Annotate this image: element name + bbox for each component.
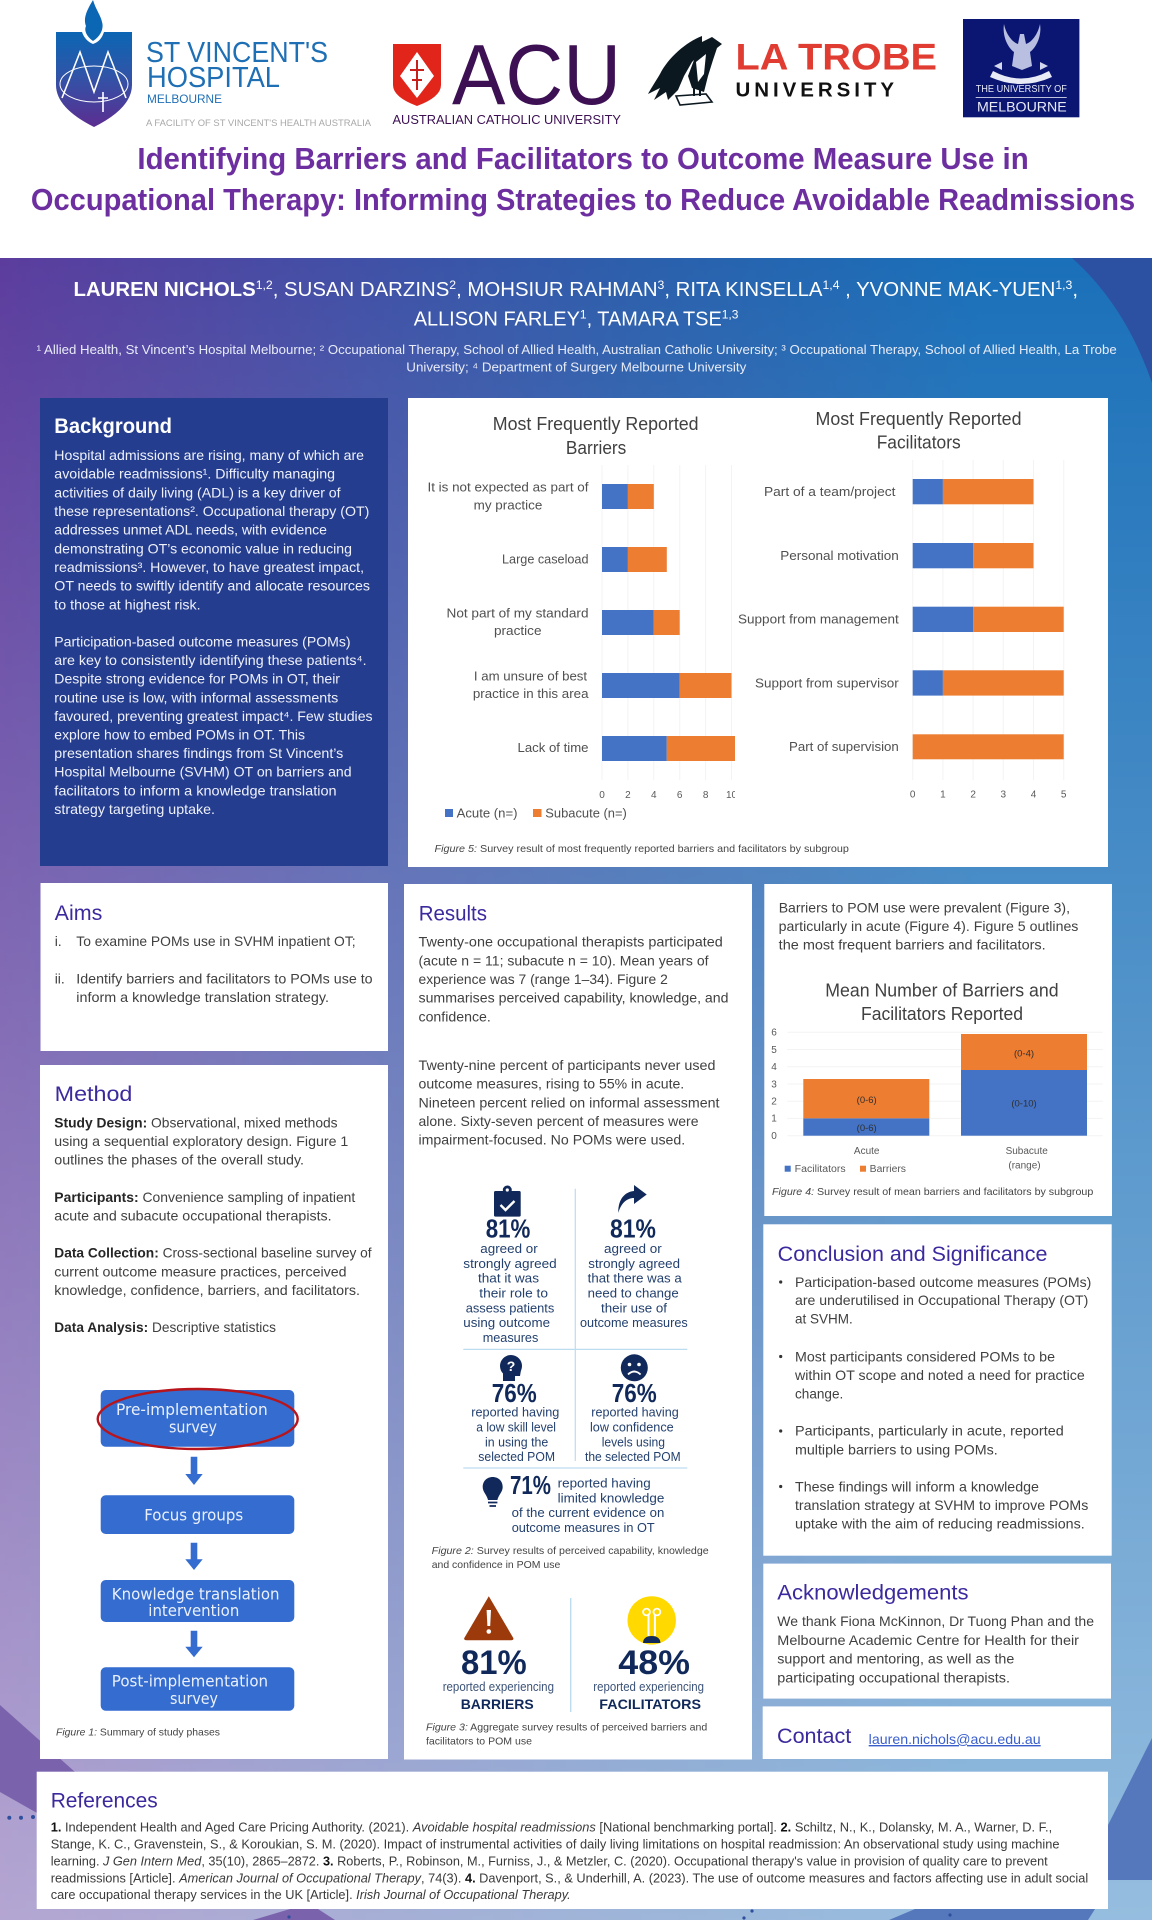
stat: 71 percent limited knowledge: of the current evidence on	[512, 1505, 664, 1520]
infographic: figure 2 capability, knowledge and confidence	[463, 1185, 688, 1535]
chart: mean number of barriers and facilitators: 6	[771, 1028, 777, 1039]
authors: 2	[449, 278, 456, 292]
stat: 81 percent barriers: reported experiencing	[443, 1680, 554, 1694]
chart: most frequently reported facilitators	[738, 409, 1067, 800]
infographic: figure 3 barriers and facilitators	[443, 1596, 704, 1712]
text: background body: demonstrating OT’s economic value in reducing	[54, 540, 352, 556]
stat: 76 percent low skill	[471, 1380, 559, 1464]
text: aims list	[55, 933, 373, 1005]
text: background body: Despite strong evidence for POMs in OT, their	[54, 671, 340, 687]
flow diagram: study phases: survey	[169, 1417, 217, 1436]
text: conclusion bullets: These findings will inform a knowledge	[795, 1478, 1039, 1494]
authors: 1	[580, 307, 587, 321]
panel: aims	[40, 883, 388, 1051]
chart: most frequently reported barriers: 8	[703, 790, 709, 801]
stat: 48 percent facilitators: FACILITATORS	[599, 1696, 701, 1712]
text: results body: impairment-focused. No POMs were used.	[418, 1132, 685, 1148]
stat: 81 percent need to change: 81%	[610, 1216, 656, 1244]
text: method body: current outcome measure practices, perceived	[54, 1264, 347, 1280]
text: aims list: i.	[55, 933, 62, 949]
panel: contact	[763, 1706, 1111, 1759]
text: results body	[418, 934, 728, 1148]
stat: 81 percent need to change: agreed or	[604, 1241, 662, 1256]
chart: most frequently reported facilitators: 3	[1001, 789, 1007, 800]
logo: University of Melbourne: MELBOURNE	[977, 100, 1067, 115]
text: conclusion bullets: multiple barriers to using POMs.	[795, 1441, 998, 1457]
authors: , MOHSIUR RAHMAN	[456, 279, 658, 301]
chart: mean number of barriers and facilitators	[771, 981, 1103, 1175]
stat: 81 percent need to change	[580, 1216, 688, 1330]
text: aims list: inform a knowledge translation strategy.	[76, 989, 329, 1005]
text: acknowledgements body: Melbourne Academic Centre for Health for their	[777, 1632, 1079, 1648]
caption: figure 3: facilitators to POM use	[426, 1735, 532, 1747]
text: barriers summary: particularly in acute (Figure 4). Figure 5 outlines	[779, 918, 1078, 934]
text: acknowledgements body: participating occupational therapists.	[777, 1670, 1010, 1686]
affiliations	[37, 342, 1117, 375]
chart: most frequently reported barriers: practice	[494, 623, 542, 638]
stat: 71 percent limited knowledge	[510, 1472, 664, 1535]
text: background body	[54, 447, 373, 817]
chart: mean number of barriers and facilitators: 1	[771, 1114, 777, 1125]
caption: figure 2: and confidence in POM use	[432, 1559, 560, 1571]
text: barriers summary: the most frequent barriers and facilitators.	[779, 936, 1046, 952]
stat: 76 percent low skill: selected POM	[478, 1449, 555, 1464]
heading: acknowledgements: Acknowledgements	[777, 1581, 969, 1604]
logo: St Vincent's Hospital Melbourne: MELBOURNE	[147, 94, 222, 106]
chart: most frequently reported barriers: Barriers	[566, 438, 626, 458]
chart: mean number of barriers and facilitators: 4	[771, 1062, 777, 1073]
title: Identifying Barriers and Facilitators to Outcome Measure Use in	[137, 141, 1029, 176]
stat: 48 percent facilitators	[593, 1644, 704, 1712]
text: results body: (acute n = 11; subacute n = 10). Mean years of	[418, 952, 709, 968]
stat: 76 percent low confidence: reported having	[591, 1404, 679, 1419]
text: method body: Study Design: Observational, mixed methods	[54, 1114, 338, 1130]
chart: most frequently reported facilitators: Part of supervision	[789, 739, 899, 754]
panel: method	[40, 1065, 388, 1759]
stat: 76 percent low skill: in using the	[485, 1434, 548, 1449]
authors: LAUREN NICHOLS	[74, 279, 256, 301]
flow diagram: study phases: Focus groups	[144, 1506, 243, 1525]
text: contact email: lauren.nichols@acu.edu.au	[869, 1731, 1041, 1747]
stat: 81 percent role to assess: using outcome	[463, 1315, 550, 1330]
icon: sad face	[621, 1354, 648, 1381]
chart: mean number of barriers and facilitators: (0-10)	[1011, 1099, 1037, 1110]
chart: most frequently reported barriers: 10	[726, 790, 737, 801]
stat: 48 percent facilitators: reported experiencing	[593, 1680, 704, 1694]
text: method body: Participants: Convenience sampling of inpatient	[54, 1189, 355, 1205]
stat: 81 percent barriers: 81%	[461, 1644, 527, 1682]
panel: references	[37, 1772, 1108, 1909]
authors: 3	[658, 278, 665, 292]
chart: most frequently reported barriers: Most Frequently Reported	[493, 414, 699, 434]
heading: results: Results	[419, 903, 487, 926]
logo: Australian Catholic University: AUSTRALIAN CATHOLIC UNIVERSITY	[392, 113, 622, 127]
text: background body: routine use is low, with informal assessments	[54, 689, 338, 705]
text: background body: activities of daily living (ADL) is a key driver of	[54, 484, 341, 500]
stat: 81 percent role to assess: agreed or	[480, 1241, 538, 1256]
stat: 81 percent need to change: outcome measures	[580, 1315, 688, 1330]
logo: St Vincent's Hospital Melbourne: HOSPITAL	[147, 62, 280, 94]
legend: acute and subacute	[445, 806, 627, 821]
chart: most frequently reported facilitators: Most Frequently Reported	[816, 409, 1022, 429]
text: method body: Data Collection: Cross-sectional baseline survey of	[54, 1245, 372, 1261]
chart: most frequently reported barriers: It is not expected as part of	[428, 480, 589, 495]
chart: most frequently reported barriers: 6	[677, 790, 683, 801]
text: background body: OT needs to swiftly identify and allocate resources	[54, 578, 370, 594]
text: aims list: ii.	[55, 970, 65, 986]
logo: St Vincent's Hospital Melbourne	[56, 0, 372, 129]
text: background body: addresses unmet ADL needs, with evidence	[54, 522, 327, 538]
text: conclusion bullets: translation strategy at SVHM to improve POMs	[795, 1497, 1088, 1513]
stat: 81 percent need to change: strongly agreed	[588, 1256, 680, 1271]
text: method body: outlines the phases of the overall study.	[54, 1152, 304, 1168]
panel: acknowledgements	[763, 1564, 1111, 1699]
stat: 81 percent role to assess: assess patients	[466, 1300, 555, 1315]
text: conclusion bullets: Most participants considered POMs to be	[795, 1348, 1055, 1364]
chart: most frequently reported facilitators: 0	[910, 789, 916, 800]
stat: 76 percent low confidence: the selected POM	[585, 1449, 681, 1464]
heading: references: References	[51, 1790, 158, 1813]
chart: mean number of barriers and facilitators: Facilitators Reported	[861, 1004, 1023, 1024]
caption: figure 2	[432, 1545, 709, 1571]
heading: aims: Aims	[55, 902, 102, 925]
text: reference list: care occupational therapy services in the UK [Article]. Irish Journal of Occupational Therapy.	[51, 1887, 571, 1902]
text: conclusion bullets: are underutilised in Occupational Therapy (OT)	[795, 1292, 1088, 1308]
chart: most frequently reported facilitators: Personal motivation	[780, 548, 899, 563]
chart: mean number of barriers and facilitators: (range)	[1008, 1160, 1041, 1172]
panel: figure 5 barriers and facilitators charts	[408, 398, 1108, 867]
stat: 81 percent role to assess: measures	[483, 1330, 539, 1345]
authors: 1,3	[722, 307, 739, 321]
authors: 1,2	[256, 278, 273, 292]
text: conclusion bullets	[779, 1274, 1091, 1532]
text: background body: explore how to embed POMs in OT. This	[54, 726, 305, 742]
legend: acute and subacute: Acute (n=)	[457, 806, 518, 821]
chart: most frequently reported facilitators: Support from management	[738, 612, 899, 627]
chart: most frequently reported barriers: practice in this area	[473, 686, 589, 701]
text: reference list: Stange, K. C., Gravenstein, S., & Koroukian, S. M. (2020). Impact of instrumental activities of daily living limitations on hospital readmission: An observational study using machine	[51, 1837, 1059, 1852]
legend: facilitators and barriers: Facilitators	[795, 1164, 846, 1175]
affiliations: ¹ Allied Health, St Vincent’s Hospital Melbourne; ² Occupational Therapy, School of Allied Health, Australian Catholic University; ³ Occupational Therapy, School of Allied Health, La Trobe	[37, 342, 1117, 357]
caption: figure 1: Figure 1: Summary of study phases	[56, 1727, 220, 1739]
authors: , RITA KINSELLA	[664, 279, 823, 301]
flow diagram: study phases: Post-implementation	[112, 1672, 268, 1691]
text: method body: Data Analysis: Descriptive statistics	[54, 1319, 276, 1335]
chart: mean number of barriers and facilitators: 2	[771, 1096, 777, 1108]
chart: mean number of barriers and facilitators: 3	[771, 1079, 777, 1090]
chart: most frequently reported barriers: my practice	[474, 497, 542, 512]
stat: 76 percent low confidence: 76%	[612, 1380, 657, 1408]
panel: background	[40, 398, 388, 866]
chart: mean number of barriers and facilitators: Subacute	[1006, 1146, 1048, 1157]
flow diagram: study phases: Pre-implementation	[116, 1400, 268, 1419]
stat: 81 percent need to change: need to change	[588, 1285, 679, 1300]
text: results body: alone. Sixty-seven percent of measures were	[418, 1113, 699, 1129]
text: results body: summarises perceived capability, knowledge, and	[418, 990, 728, 1006]
text: aims list: Identify barriers and facilitators to POMs use to	[76, 970, 373, 986]
logo: Australian Catholic University	[392, 28, 622, 127]
text: reference list: learning. J Gen Intern Med, 35(10), 2865–2872. 3. Roberts, P., Robinson, M., Furniss, J., & Metzler, C. (2020). Occupational therapy's value in provision of quality care to prevent	[51, 1853, 1048, 1868]
chart: most frequently reported barriers: I am unsure of best	[474, 668, 587, 683]
logo: St Vincent's Hospital Melbourne: A FACILITY OF ST VINCENT'S HEALTH AUSTRALIA	[146, 118, 372, 129]
chart: most frequently reported barriers: 0	[599, 790, 605, 801]
text: results body: outcome measures, rising to 55% in acute.	[418, 1076, 684, 1092]
stat: 71 percent limited knowledge: 71%	[510, 1472, 551, 1500]
panel: conclusion and significance	[763, 1224, 1112, 1556]
text: reference list	[51, 1820, 1088, 1902]
stat: 76 percent low confidence	[585, 1380, 681, 1464]
chart: most frequently reported facilitators: Support from supervisor	[755, 675, 899, 690]
panel: results continued with figure 4	[764, 884, 1112, 1216]
legend: acute and subacute: Subacute (n=)	[545, 806, 627, 821]
chart: most frequently reported facilitators: Part of a team/project	[764, 484, 896, 499]
text: reference list: readmissions [Article]. American Journal of Occupational Therapy, 74(3). 4. Davenport, S., & Underhill, A. (2023). The use of outcome measures and factors affecting use in adult social	[51, 1870, 1088, 1885]
flow diagram: study phases	[98, 1389, 298, 1711]
icon: warning triangle	[464, 1596, 513, 1640]
stat: 71 percent limited knowledge: outcome measures in OT	[512, 1520, 655, 1535]
flow diagram: study phases: survey	[170, 1689, 218, 1708]
stat: 76 percent low confidence: low confidence	[590, 1419, 674, 1434]
logo: University of Melbourne	[963, 19, 1079, 117]
affiliations: University; ⁴ Department of Surgery Melbourne University	[406, 360, 747, 375]
authors: 1,3	[1055, 278, 1073, 292]
text: background body: readmissions³. However, to have greatest impact,	[54, 559, 364, 575]
authors: , SUSAN DARZINS	[273, 279, 449, 301]
stat: 76 percent low skill: 76%	[492, 1380, 537, 1408]
chart: most frequently reported barriers: Lack of time	[518, 740, 588, 755]
text: background body: strategy targeting uptake.	[54, 801, 215, 817]
chart: most frequently reported facilitators: 4	[1031, 789, 1037, 800]
chart: most frequently reported facilitators: 5	[1061, 789, 1067, 800]
text: acknowledgements body	[777, 1613, 1094, 1686]
authors	[74, 278, 1078, 330]
icon: head with question mark	[500, 1355, 522, 1381]
chart: mean number of barriers and facilitators: (0-6)	[857, 1095, 877, 1106]
text: conclusion bullets: within OT scope and noted a need for practice	[794, 1367, 1085, 1383]
heading: method: Method	[55, 1083, 132, 1106]
stat: 76 percent low skill: a low skill level	[476, 1419, 556, 1434]
chart: most frequently reported barriers	[428, 414, 737, 801]
chart: mean number of barriers and facilitators: (0-6)	[857, 1123, 877, 1134]
text: results body: confidence.	[418, 1008, 491, 1024]
panel: results	[404, 884, 752, 1760]
caption: figure 2: Figure 2: Survey results of perceived capability, knowledge	[432, 1545, 709, 1557]
text: conclusion bullets: Participation-based outcome measures (POMs)	[795, 1274, 1091, 1290]
authors: 1,4	[823, 278, 840, 292]
text: results body: Twenty-nine percent of participants never used	[418, 1057, 716, 1073]
caption: figure 3	[426, 1722, 707, 1747]
legend: facilitators and barriers	[785, 1164, 906, 1175]
stat: 81 percent role to assess	[463, 1216, 557, 1345]
chart: mean number of barriers and facilitators: 5	[771, 1045, 777, 1056]
stat: 81 percent role to assess: strongly agreed	[463, 1256, 557, 1271]
text: background body: avoidable readmissions¹. Difficulty managing	[54, 466, 335, 482]
text: acknowledgements body: We thank Fiona McKinnon, Dr Tuong Phan and the	[777, 1613, 1094, 1629]
text: conclusion bullets: uptake with the aim of reducing readmissions.	[795, 1516, 1085, 1532]
icon: head with question mark: ?	[507, 1358, 515, 1374]
stat: 76 percent low skill: reported having	[471, 1404, 559, 1419]
stat: 76 percent low confidence: levels using	[602, 1434, 665, 1449]
heading: contact: Contact	[777, 1725, 851, 1748]
heading: background: Background	[54, 415, 172, 438]
stat: 81 percent role to assess: their role to	[479, 1285, 548, 1300]
icon: yellow idea bulb	[628, 1596, 676, 1645]
text: method body: acute and subacute occupational therapists.	[54, 1208, 332, 1224]
icon: curved arrow	[618, 1185, 647, 1213]
logo: University of Melbourne: THE UNIVERSITY OF	[976, 84, 1067, 95]
logo: St Vincent's Hospital Melbourne: ST VINCENT'S	[146, 37, 328, 69]
caption: figure 5: Figure 5: Survey result of most frequently reported barriers and facilitators by subgroup	[434, 843, 849, 855]
chart: mean number of barriers and facilitators: Mean Number of Barriers and	[825, 981, 1059, 1001]
text: aims list: To examine POMs use in SVHM inpatient OT;	[76, 933, 356, 949]
text: background body: facilitators to inform a knowledge translation	[54, 782, 337, 798]
stat: 48 percent facilitators: 48%	[618, 1644, 690, 1682]
text: conclusion bullets: change.	[795, 1386, 843, 1402]
text: background body: to those at highest risk.	[54, 596, 201, 612]
stat: 71 percent limited knowledge: reported having	[558, 1476, 651, 1491]
text: method body: knowledge, confidence, barriers, and facilitators.	[54, 1282, 360, 1298]
chart: mean number of barriers and facilitators: (0-4)	[1014, 1049, 1034, 1060]
text: conclusion bullets: Participants, particularly in acute, reported	[795, 1423, 1064, 1439]
authors: ALLISON FARLEY	[414, 308, 580, 330]
authors: , YVONNE MAK-YUEN	[839, 279, 1055, 301]
text: results body: experience was 7 (range 1–34). Figure 2	[418, 971, 668, 987]
text: background body: are key to consistently identifying these patients⁴.	[54, 652, 367, 668]
logo: La Trobe University: UNIVERSITY	[736, 79, 894, 102]
text: method body	[54, 1114, 372, 1335]
text: acknowledgements body: support and mentoring, as well as the	[777, 1651, 1015, 1667]
text: background body: Hospital Melbourne (SVHM) OT on barriers and	[54, 764, 352, 780]
legend: facilitators and barriers: Barriers	[870, 1164, 906, 1175]
logo: La Trobe University	[648, 36, 937, 105]
chart: most frequently reported barriers: Not part of my standard	[446, 605, 588, 620]
title	[31, 141, 1135, 217]
chart: most frequently reported facilitators: 1	[940, 789, 946, 800]
chart: mean number of barriers and facilitators: Acute	[854, 1146, 880, 1157]
text: results body: Nineteen percent relied on informal assessment	[418, 1094, 720, 1110]
text: barriers summary: Barriers to POM use were prevalent (Figure 3),	[779, 900, 1070, 916]
logo: Australian Catholic University: ACU	[452, 28, 621, 123]
stat: 81 percent need to change: their use of	[601, 1300, 667, 1315]
stat: 71 percent limited knowledge: limited knowledge	[558, 1490, 664, 1506]
chart: mean number of barriers and facilitators: 0	[771, 1131, 777, 1142]
chart: most frequently reported barriers: 2	[625, 790, 631, 801]
text: conclusion bullets: at SVHM.	[795, 1311, 853, 1327]
stat: 81 percent need to change: that there was a	[588, 1270, 682, 1286]
chart: most frequently reported barriers: 4	[651, 790, 657, 801]
chart: most frequently reported facilitators: 2	[970, 789, 976, 800]
flow diagram: study phases: Knowledge translation	[112, 1584, 280, 1603]
text: background body: Participation-based outcome measures (POMs)	[54, 633, 351, 649]
flow diagram: study phases: intervention	[148, 1601, 239, 1620]
chart: most frequently reported facilitators: Facilitators	[877, 433, 961, 453]
authors: , TAMARA TSE	[587, 308, 722, 330]
icon: clipboard with check	[494, 1186, 521, 1217]
stat: 81 percent barriers: BARRIERS	[461, 1696, 534, 1712]
text: barriers summary	[779, 900, 1078, 952]
text: results body: Twenty-one occupational therapists participated	[418, 934, 723, 950]
text: background body: these representations². Occupational therapy (OT)	[54, 503, 369, 519]
icon: light bulb	[483, 1477, 503, 1506]
text: method body: using a sequential exploratory design. Figure 1	[54, 1133, 349, 1149]
caption: figure 4: Figure 4: Survey result of mean barriers and facilitators by subgroup	[772, 1186, 1093, 1198]
caption: figure 3: Figure 3: Aggregate survey results of perceived barriers and	[426, 1722, 707, 1734]
stat: 81 percent role to assess: that it was	[478, 1270, 540, 1286]
stat: 81 percent role to assess: 81%	[486, 1216, 530, 1244]
text: reference list: 1. Independent Health and Aged Care Pricing Authority. (2021). Avoidable hospital readmissions [National benchmarking portal]. 2. Schiltz, N., K., Dolansky, M. A., Warner, D. F.,	[51, 1820, 1052, 1835]
logo: La Trobe University: LA TROBE	[736, 36, 937, 78]
stat: 81 percent barriers	[443, 1644, 554, 1712]
heading: conclusion: Conclusion and Significance	[778, 1243, 1047, 1266]
chart: most frequently reported barriers: Large caseload	[502, 551, 588, 566]
text: background body: presentation shares findings from St Vincent’s	[54, 745, 343, 761]
text: background body: Hospital admissions are rising, many of which are	[54, 447, 364, 463]
authors: ,	[1072, 279, 1078, 301]
text: background body: favoured, preventing greatest impact⁴. Few studies	[54, 708, 373, 724]
